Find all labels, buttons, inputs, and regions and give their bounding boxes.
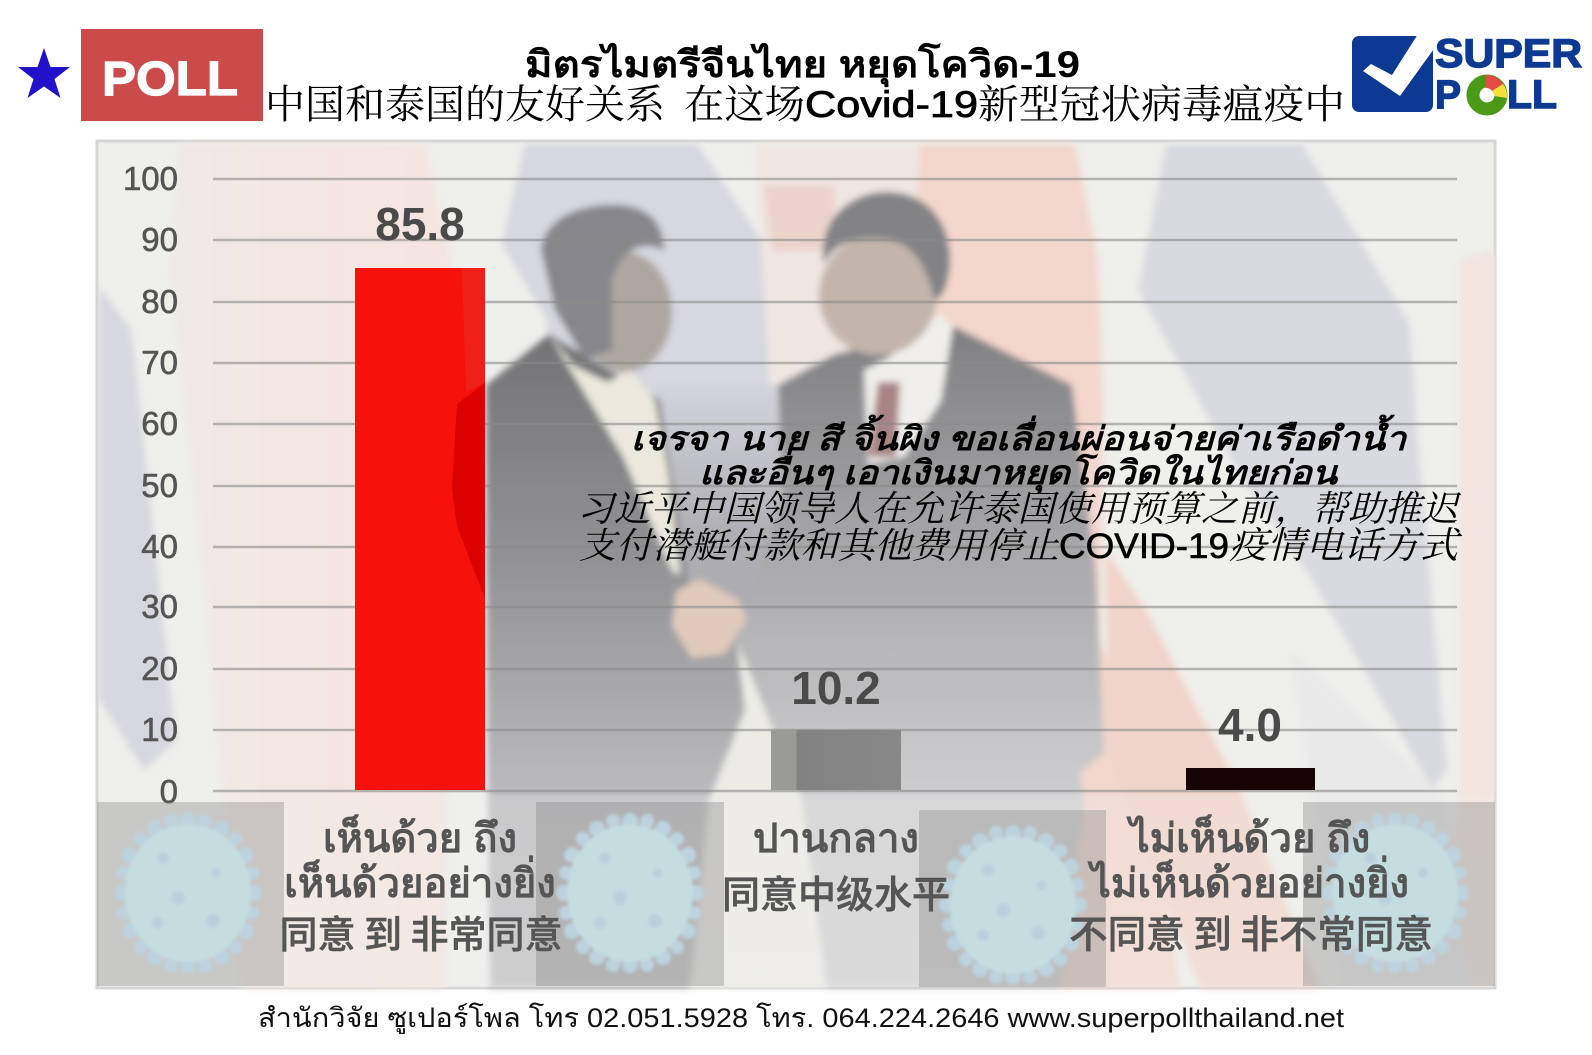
leader right: suit (737, 326, 1104, 988)
grid lines (213, 179, 1457, 791)
panel: chart with faded photo background (97, 141, 1495, 988)
bar: disagree 4.0 (1186, 699, 1315, 790)
logo: Super Poll (1352, 32, 1582, 117)
y axis labels: 10 (141, 711, 178, 748)
lower fade (99, 795, 1493, 987)
y axis labels: 30 (141, 588, 178, 625)
background photo: flags and two leaders shaking hands (99, 144, 1494, 988)
category label: agree (279, 813, 563, 959)
hands (672, 579, 747, 658)
y axis labels: 0 (160, 773, 178, 810)
bar: agree 85.8: 85.8 (375, 198, 465, 250)
callout: Thai and Chinese commentary: 习近平中国领导人在允许泰国使用预算之前，帮助推迟 (577, 481, 1462, 532)
callout: Thai and Chinese commentary (577, 414, 1462, 569)
logo: Super Poll: LL (1507, 73, 1557, 117)
callout: Thai and Chinese commentary: COVID-19 (1059, 527, 1229, 566)
y axis labels: 60 (141, 405, 178, 442)
logo: Super Poll: SUPER (1435, 32, 1582, 76)
title: Chinese heading (265, 73, 1345, 130)
icon: blue star (18, 48, 70, 98)
y axis labels: 80 (141, 283, 178, 320)
y axis labels: 70 (141, 344, 178, 381)
title: Chinese heading: 中国和泰国的友好关系 (265, 73, 665, 130)
gap between leaders (655, 385, 795, 640)
callout: Thai and Chinese commentary: 支付潜艇付款和其他费用停止 (579, 518, 1060, 569)
white gap triangle (690, 642, 826, 988)
y axis labels: 90 (141, 221, 178, 258)
title: Thai heading: มิตรไมตรีจีนไทย หยุดโควิด-19 (525, 42, 1080, 88)
y axis labels (123, 160, 178, 810)
category label: disagree (1069, 813, 1433, 960)
virus panels (97, 802, 1495, 987)
category label: agree: เห็นด้วย ถึง (323, 813, 517, 861)
leader right: head (819, 235, 937, 355)
y axis labels: 20 (141, 650, 178, 687)
title: Chinese heading: 新型冠状病毒瘟疫中 (978, 73, 1345, 130)
bar: agree 85.8 (355, 198, 485, 790)
callout: Thai and Chinese commentary: และอื่นๆ เอาเงินมาหยุดโควิดในไทยก่อน (699, 449, 1339, 494)
y axis labels: 100 (123, 160, 178, 197)
title: Chinese heading: 在这场 (684, 73, 805, 130)
category label: neutral: 同意中级水平 (722, 864, 950, 919)
logo: Super Poll: P (1435, 73, 1461, 117)
POLL badge (81, 29, 263, 121)
footer: contact line: สำนักวิจัย ซูเปอร์โพล โทร 02.051.5928 โทร. 064.224.2646 www.superpollthailand.net (258, 1002, 1345, 1034)
category label: neutral: ปานกลาง (753, 817, 919, 861)
leader left: head (578, 252, 672, 372)
category label: agree: 同意 到 非常同意 (279, 904, 563, 959)
leader left: suit (486, 334, 745, 988)
POLL badge: POLL (102, 53, 238, 106)
bar: disagree 4.0: 4.0 (1218, 699, 1282, 751)
leader left: shirt (549, 334, 680, 575)
category label: disagree: 不同意 到 非不常同意 (1069, 904, 1433, 960)
callout: Thai and Chinese commentary: 疫情电话方式 (1229, 515, 1462, 569)
leader right: shirt (864, 314, 953, 464)
y axis labels: 40 (141, 528, 178, 565)
category label: disagree: ไม่เห็นด้วย ถึง (1126, 813, 1370, 861)
category label: agree: เห็นด้วยอย่างยิ่ง (284, 855, 556, 906)
category label: neutral (722, 817, 950, 919)
y axis labels: 50 (141, 467, 178, 504)
callout: Thai and Chinese commentary: เจรจา นาย สี จิ้นผิง ขอเลื่อนผ่อนจ่ายค่าเรือดำน้ำ (631, 414, 1408, 457)
bar: neutral 10.2: 10.2 (791, 662, 881, 714)
title: Chinese heading: Covid-19 (805, 84, 978, 125)
category label: disagree: ไม่เห็นด้วยอย่างยิ่ง (1087, 855, 1409, 906)
bar: neutral 10.2 (771, 662, 901, 790)
